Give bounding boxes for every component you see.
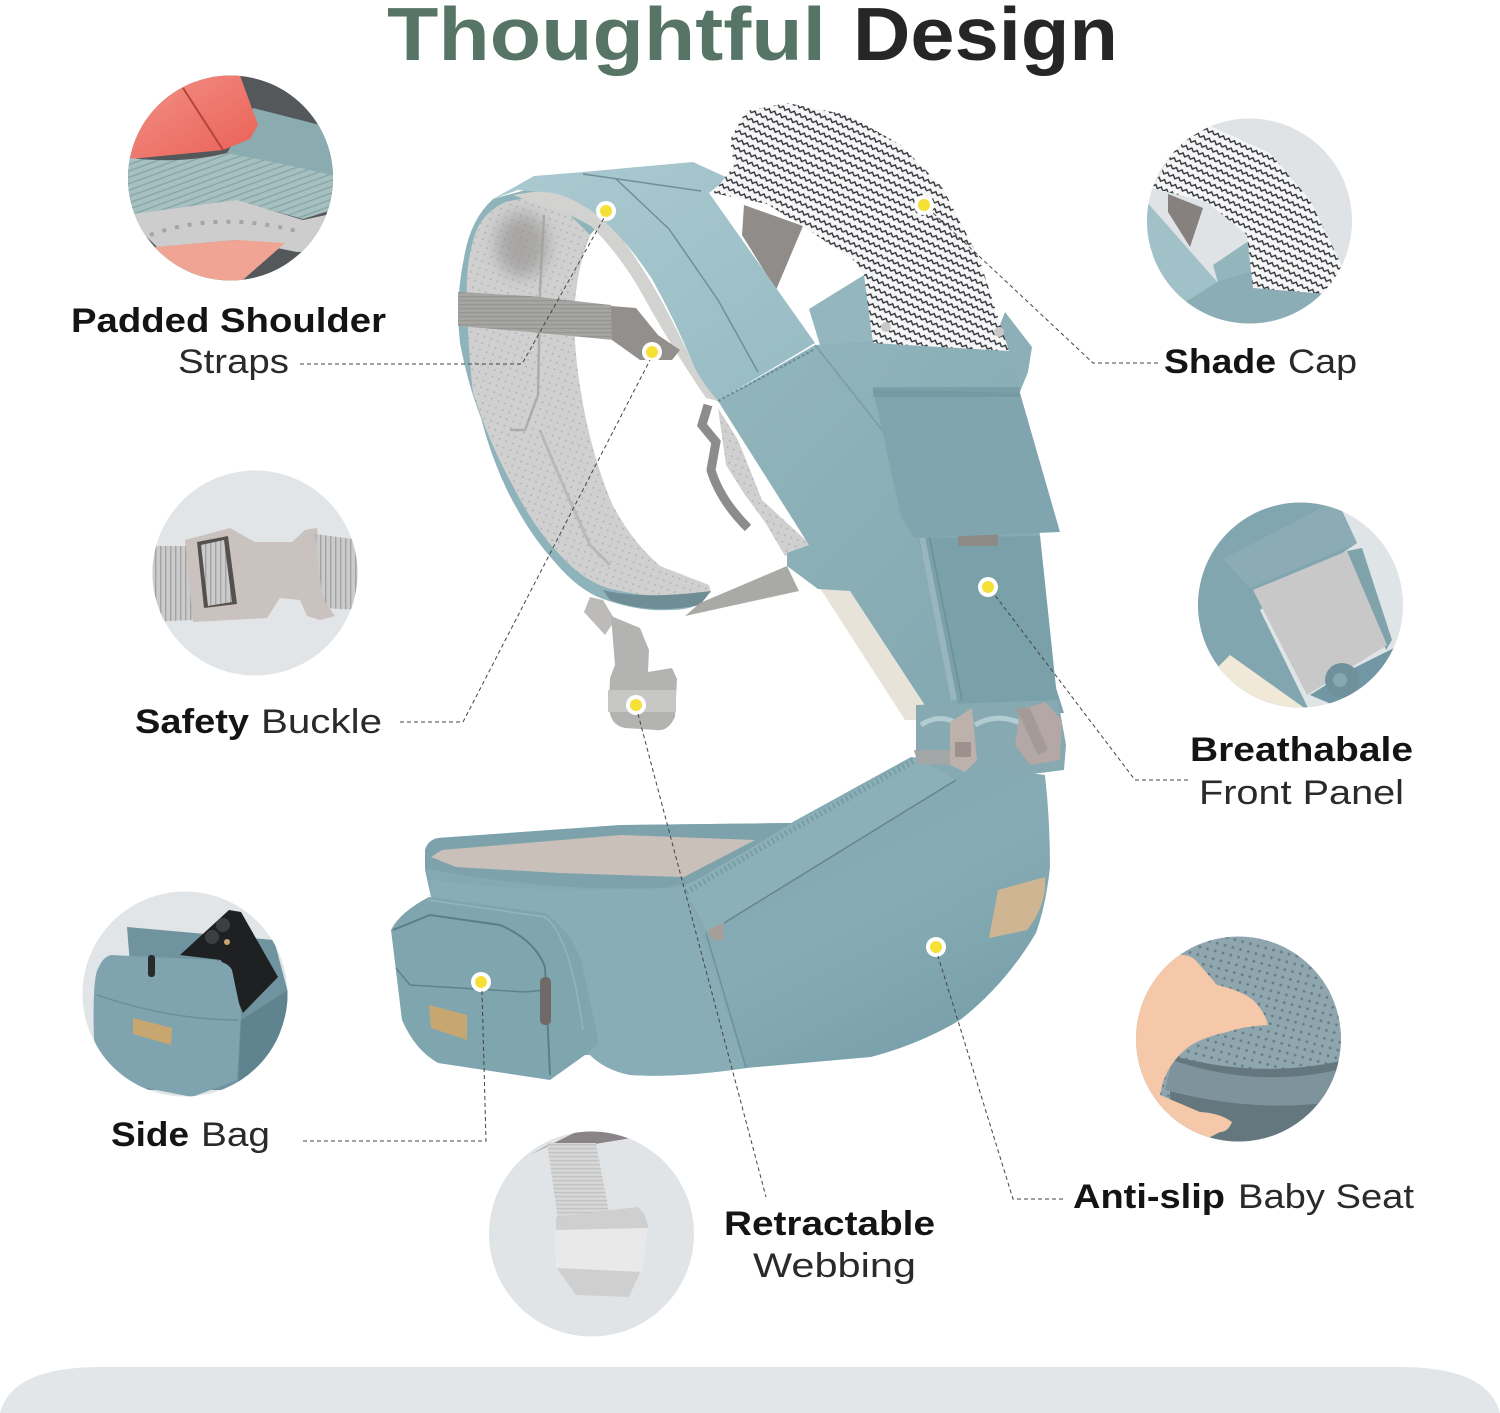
bottom edge (1170, 1058, 1338, 1142)
hand (1130, 950, 1268, 1146)
mesh band (134, 200, 326, 252)
label: padded shoulder straps: Straps (178, 343, 289, 381)
side bag (391, 897, 599, 1080)
label: anti-slip baby seat (1073, 1178, 1415, 1216)
flap (1223, 500, 1357, 588)
front bag (94, 955, 241, 1097)
rolled panel (1325, 663, 1354, 696)
bag label (429, 1005, 467, 1040)
back strap (742, 205, 803, 290)
seat left panel (431, 880, 746, 1076)
label: anti-slip baby seat: Baby Seat (1238, 1178, 1415, 1216)
label: shade cap: Shade (1164, 343, 1276, 381)
folded tab (556, 1207, 648, 1297)
seat body (425, 757, 1050, 1076)
seat inner (431, 835, 755, 877)
seat patch (989, 877, 1045, 938)
mesh panel (1253, 551, 1387, 695)
label: side bag: Bag (201, 1116, 270, 1154)
strap panel (1147, 204, 1218, 305)
lower fingers (155, 240, 285, 285)
label: shade cap (1164, 343, 1357, 381)
brand tag (958, 533, 998, 546)
cap snaps (881, 322, 1004, 337)
seat ridge band (684, 757, 956, 933)
leader lines (300, 212, 1188, 1199)
lower strap edge (603, 590, 711, 609)
baby carrier illustration (391, 103, 1066, 1080)
phone (180, 910, 278, 1013)
right slot (315, 534, 324, 596)
waist belt (916, 700, 1066, 778)
torso (1186, 272, 1328, 324)
strap (547, 1143, 609, 1220)
beige panel (1218, 655, 1304, 708)
label: padded shoulder straps (71, 302, 386, 381)
label: anti-slip baby seat: Anti-slip (1073, 1178, 1225, 1216)
shade cap (713, 103, 1009, 351)
label: side bag: Side (111, 1116, 189, 1154)
label: retractable webbing (724, 1205, 935, 1285)
teal strap (227, 108, 333, 176)
label: safety buckle: Buckle (261, 703, 382, 741)
rear bag (127, 927, 290, 1090)
webbing (150, 546, 193, 622)
torso bump (809, 275, 880, 345)
label: side bag (111, 1116, 270, 1154)
label: breathable front panel: Front Panel (1199, 774, 1404, 812)
side strip (238, 990, 288, 1085)
beige back panel (818, 585, 945, 720)
label: breathable front panel: Breathabale (1190, 731, 1413, 769)
photo: padded shoulder (128, 76, 333, 280)
lower panel shade (918, 536, 1062, 713)
label: breathable front panel (1190, 731, 1413, 812)
label (133, 1018, 172, 1045)
mesh shadow (496, 213, 548, 277)
torso panel (718, 340, 1064, 713)
photo: anti-slip seat (1130, 934, 1345, 1146)
label: padded shoulder straps: Padded Shoulder (71, 302, 386, 340)
seam (706, 933, 746, 1068)
belt buckles (914, 702, 1062, 772)
lower gray strap (685, 566, 799, 616)
photo: retractable webbing (485, 1125, 697, 1340)
photo: shade cap (1147, 118, 1352, 324)
fingers (130, 76, 258, 159)
marker dots (471, 195, 998, 992)
shoulder strap backing (458, 174, 711, 610)
front shoulder strap (493, 162, 815, 401)
gray strap (1168, 194, 1203, 247)
title (387, 0, 1118, 76)
label: retractable webbing: Webbing (753, 1247, 916, 1285)
bag zipper pull (540, 977, 551, 1025)
teal body (1195, 500, 1357, 712)
right strip (1347, 548, 1392, 650)
side ring strap (702, 405, 748, 528)
front panel zipper (920, 527, 954, 700)
zipper pull (148, 955, 155, 977)
side mesh (718, 408, 811, 556)
retractable webbing (608, 616, 677, 730)
buckle body (185, 528, 335, 622)
label: safety buckle (135, 703, 382, 741)
photo: side bag (80, 888, 290, 1100)
webbing loop (584, 597, 615, 635)
tab band (555, 1228, 648, 1272)
photo: safety buckle (150, 468, 360, 678)
bottom band (0, 1367, 1500, 1413)
label: shade cap: Cap (1288, 343, 1357, 381)
seat rim (425, 823, 791, 889)
front flap (873, 389, 1060, 538)
torso bump (1213, 242, 1252, 282)
chest strap (458, 292, 613, 340)
left slot (197, 536, 237, 608)
shoulder mesh padding (467, 197, 711, 597)
cap (1152, 126, 1342, 294)
lower right fold (1310, 648, 1394, 704)
twill band (122, 153, 340, 219)
label: safety buckle: Safety (135, 703, 249, 741)
strap gray rim (513, 190, 718, 401)
chest strap buckle (611, 306, 680, 360)
label: retractable webbing: Retractable (724, 1205, 935, 1243)
dark top (531, 1132, 628, 1154)
photo: breathable front panel (1195, 500, 1410, 712)
seat zipper tab (708, 923, 724, 940)
